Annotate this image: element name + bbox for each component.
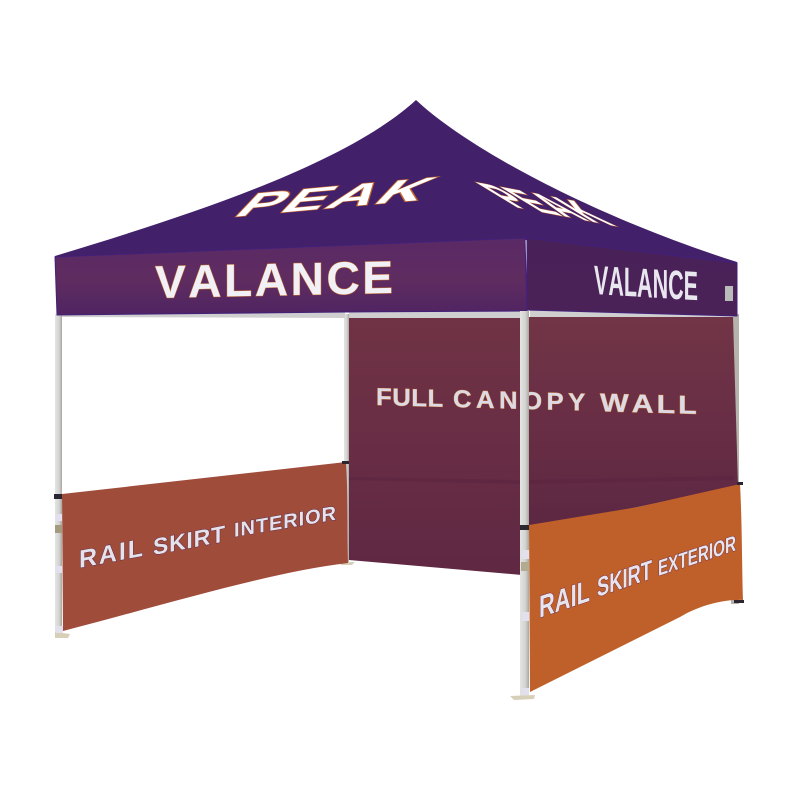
valance fabric side bbox=[527, 238, 737, 316]
valance fabric front bbox=[55, 238, 527, 315]
skirt label exterior bbox=[539, 531, 736, 625]
roof surface bbox=[55, 100, 737, 264]
skirt fabric interior bbox=[62, 462, 348, 631]
skirt label interior: RAIL bbox=[79, 534, 143, 574]
panel: side valance bbox=[527, 238, 737, 316]
strap bbox=[737, 482, 743, 485]
frame truss under canopy bbox=[62, 310, 733, 318]
peak label right: PEAK bbox=[460, 174, 630, 234]
panel: front valance bbox=[55, 238, 527, 315]
panel: rail skirt interior bbox=[62, 461, 349, 631]
icon: brand tag bbox=[725, 286, 733, 301]
wall label: FULL bbox=[376, 384, 443, 413]
skirt label interior: SKIRT bbox=[153, 521, 225, 560]
skirt label interior: INTERIOR bbox=[234, 503, 336, 542]
skirt label exterior: EXTERIOR bbox=[658, 531, 736, 581]
wall label: CANOPY bbox=[453, 386, 586, 416]
front corner pole bbox=[510, 311, 535, 700]
wall label: WALL bbox=[600, 388, 697, 419]
foot bbox=[734, 600, 744, 603]
wall right panel bbox=[528, 317, 738, 530]
skirt label interior bbox=[79, 503, 336, 574]
panel: full canopy wall bbox=[349, 317, 738, 575]
panel: rail skirt exterior bbox=[529, 482, 744, 692]
valance label side: VALANCE bbox=[594, 257, 698, 309]
right rear pole bbox=[731, 314, 739, 604]
strap bbox=[342, 461, 349, 464]
skirt label exterior: SKIRT bbox=[597, 554, 652, 603]
back left pole foot bbox=[340, 562, 355, 565]
back left pole bbox=[344, 314, 349, 562]
panel: canopy roof bbox=[55, 100, 737, 264]
left front pole bbox=[54, 314, 70, 638]
wall left panel bbox=[349, 317, 522, 575]
skirt fabric exterior bbox=[529, 484, 743, 692]
peak label front: PEAK bbox=[225, 170, 446, 224]
skirt label exterior: RAIL bbox=[539, 572, 590, 625]
wall label bbox=[376, 384, 697, 419]
valance label front: VALANCE bbox=[155, 251, 393, 308]
